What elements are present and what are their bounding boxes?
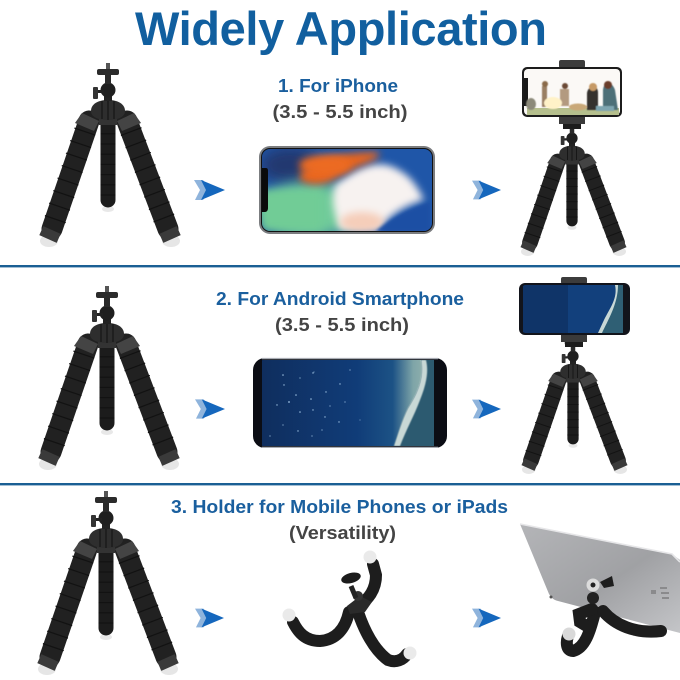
- divider 1: [0, 265, 680, 267]
- arrow: row 2 right: [472, 400, 501, 418]
- phone on clamp: Android: [519, 277, 630, 347]
- heading: row 2: (3.5 - 5.5 inch): [275, 315, 409, 335]
- heading: row 1: 1. For iPhone: [278, 76, 398, 96]
- heading: row 2: [216, 289, 464, 335]
- photo: people: [526, 81, 618, 111]
- phone on clamp: iPhone with photo: [522, 60, 622, 129]
- divider 2: [0, 483, 680, 485]
- heading: row 1: [272, 76, 408, 122]
- flexible tripod: bent legs: [282, 550, 416, 661]
- tripod: row 2 left: [39, 286, 179, 470]
- tripod: row 1 right: [521, 118, 626, 256]
- title: Widely Application: [135, 2, 547, 55]
- phone: Android: [253, 358, 447, 448]
- tablet on flexible tripod: [520, 524, 680, 651]
- heading: row 3: [171, 497, 508, 543]
- arrow: row 2 left: [195, 399, 225, 419]
- heading: row 2: 2. For Android Smartphone: [216, 289, 464, 309]
- arrow: row 1 left: [194, 180, 225, 200]
- heading: row 3: 3. Holder for Mobile Phones or iPads: [171, 497, 508, 517]
- tripod: row 1 left: [40, 63, 180, 247]
- phone: iPhone: [258, 146, 435, 238]
- arrow: row 1 right: [472, 181, 501, 199]
- tripod: row 3 left: [38, 491, 178, 675]
- heading: row 3: (Versatility): [289, 523, 396, 543]
- heading: row 1: (3.5 - 5.5 inch): [272, 102, 408, 122]
- arrow: row 3 right: [472, 609, 501, 627]
- tripod: row 2 right: [522, 336, 627, 474]
- stars: [269, 369, 360, 437]
- arrow: row 3 left: [195, 609, 224, 627]
- tripod legs behind tablet: [567, 609, 661, 651]
